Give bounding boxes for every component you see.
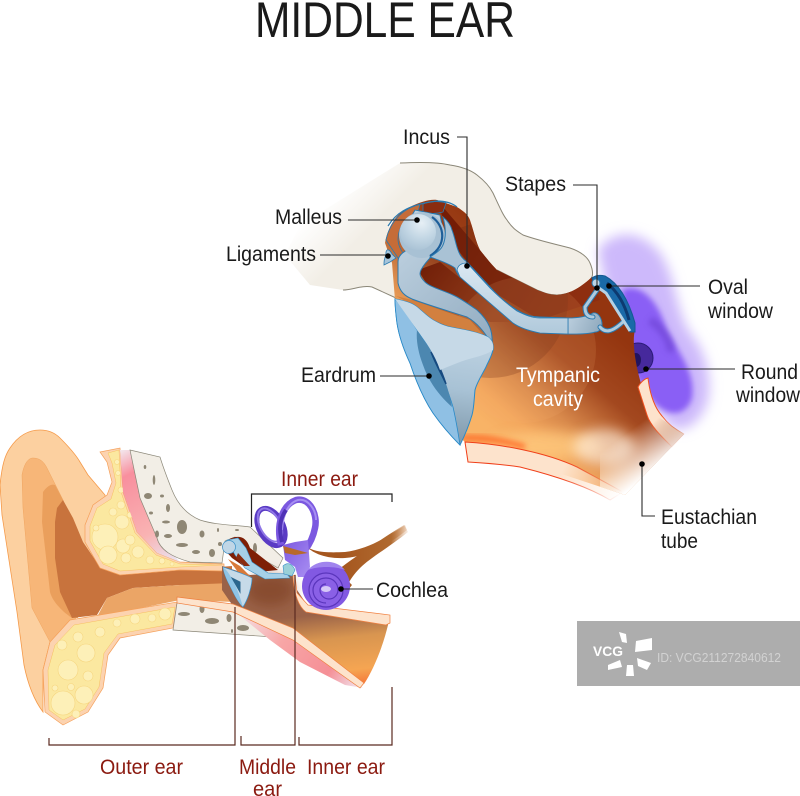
label: Oval window: Oval [708,276,748,299]
fade to white [600,420,684,495]
upper chamber blocks [384,201,457,265]
temporal bone [285,162,593,298]
nerve bundle [305,525,408,586]
incus [430,217,602,334]
watermark logo: VCG [593,643,623,659]
label: Round window [735,361,800,407]
purple glow behind the windows [598,235,709,429]
labels: ear regions [100,468,448,796]
bone lower [173,603,273,637]
leader lines and markers [320,137,735,592]
label: Tympanic cavity [516,364,600,411]
label: Eardrum: Eardrum [301,364,376,387]
malleus [398,210,492,345]
concentric shade circle light [458,278,596,404]
upper fat [85,448,224,575]
brackets [49,494,392,745]
pinna [0,430,232,712]
watermark id: ID: VCG211272840612 [657,650,781,665]
lower cavity [222,566,388,684]
dark region above incus [437,200,600,320]
muscle pink upper [120,450,180,562]
diagram: whole ear cross-section [0,430,408,725]
sandy whitening near floor [574,429,634,465]
label: Eustachian tube [661,506,757,553]
concentric shade circle dark [412,222,568,378]
eardrum [395,299,493,445]
orange strip between malleus and drum [396,296,490,342]
bone upper [130,450,283,568]
golden wash [490,432,600,460]
stapes [585,290,625,331]
label: Cochlea: Cochlea [376,579,448,602]
label: Inner ear bottom: Inner ear [307,756,385,779]
label: Tympanic cavity: Tympanic [516,364,600,387]
small middle ear [222,537,295,607]
label: Oval window: window [707,300,774,323]
muscle pink lower [233,610,363,688]
label: Middle ear: Middle [239,756,296,779]
label: Tympanic cavity: cavity [533,388,583,411]
label: Malleus: Malleus [275,206,342,229]
floor band [465,442,623,500]
lower fat [43,602,177,725]
red glow at floor [462,438,525,447]
right band [638,378,684,447]
vestibule [283,540,310,577]
shaded chamber behind eardrum [246,574,294,606]
oval window [592,275,635,332]
vestibule nerve root [283,546,308,555]
label: Middle ear [239,756,296,796]
label: Eustachian tube: Eustachian [661,506,757,529]
label: Outer ear: Outer ear [100,756,183,779]
label: Eustachian tube: tube [661,530,698,553]
peach band cochlear side [293,575,390,625]
cochlea [302,562,352,610]
peach band canal floor [177,597,364,688]
label: Inner ear top: Inner ear [281,468,358,491]
diagram: middle ear detail [285,162,709,510]
watermark [577,621,800,686]
watermark logo [593,632,652,676]
dark region under incus [420,262,502,322]
label: Incus: Incus [403,126,450,149]
labels: middle ear [226,126,800,553]
semicircular canals [251,500,316,550]
label: Ligaments: Ligaments [226,243,316,266]
round window [623,343,653,373]
canal floor lighter [97,583,235,617]
label: Oval window [707,276,774,323]
bone outline [343,162,593,298]
tympanic cavity [385,200,684,495]
label: Stapes: Stapes [505,173,566,196]
